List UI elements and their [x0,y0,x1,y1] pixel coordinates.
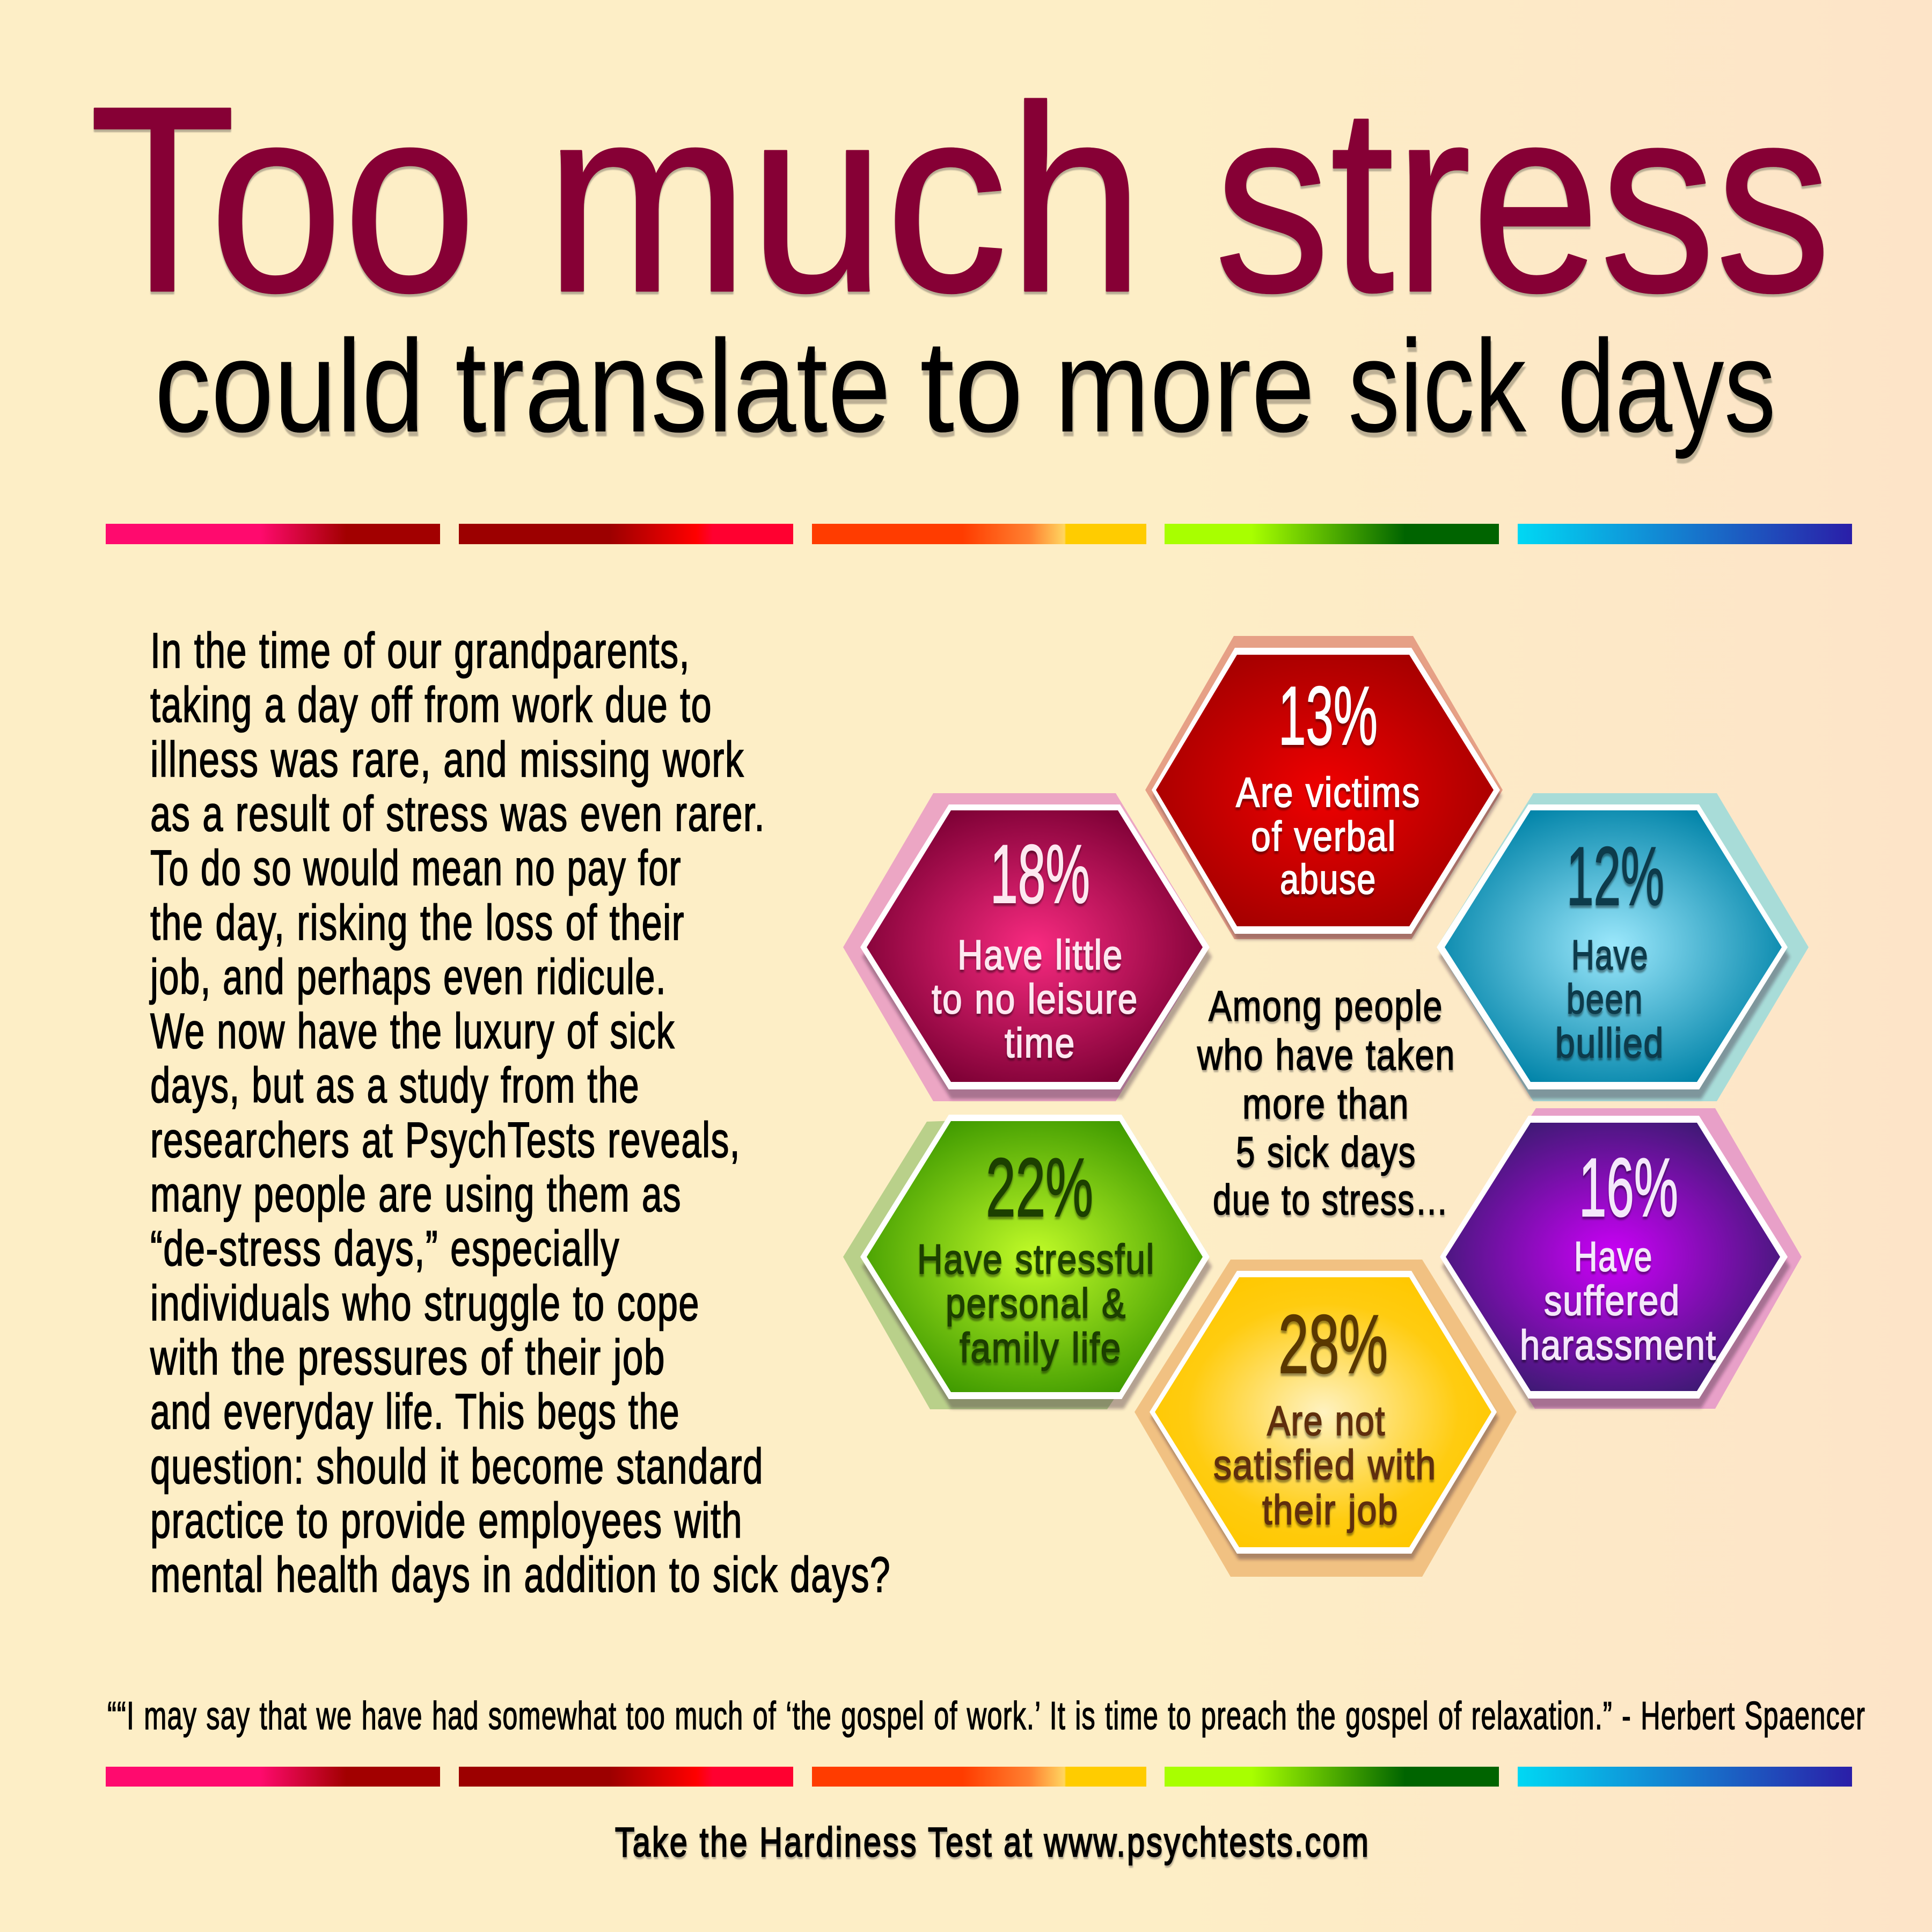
body text block: and everyday life. This begs the [150,1384,680,1439]
center caption: more than [1242,1080,1409,1128]
subtitle: could [155,312,425,459]
hexagon: 12% bullied [1437,793,1809,1101]
12% hexagon text: bullied [1555,1019,1664,1066]
22% hexagon text: Have stressful [917,1235,1155,1283]
title: much [545,51,1144,347]
28% hexagon text [1213,1298,1437,1533]
18% hexagon text: to no leisure [932,975,1138,1022]
18% hexagon text [932,828,1138,1066]
body text block: researchers at PsychTests reveals, [150,1112,741,1168]
body text block: To do so would mean no pay for [150,840,682,896]
16% hexagon text: harassment [1520,1321,1717,1368]
center caption: due to stress… [1213,1176,1449,1224]
28% hexagon text: their job [1262,1486,1399,1533]
hexagon: 18% little leisure time [843,793,1210,1101]
16% hexagon text: 16% [1579,1141,1678,1234]
12% hexagon text: been [1567,975,1643,1022]
hexagon: 28% job dissatisfaction [1135,1260,1517,1577]
12% hexagon text: 12% [1567,830,1664,923]
28% hexagon text: 28% [1278,1298,1388,1391]
16% hexagon text: Have [1574,1233,1653,1280]
top rainbow divider [106,524,1852,544]
subtitle: sick [1348,312,1526,459]
hexagon: 22% stressful personal life [843,1115,1210,1409]
bottom rainbow divider [106,1767,1852,1787]
13% hexagon text: of verbal [1251,813,1396,860]
center caption: Among people [1209,982,1443,1030]
body text block: the day, risking the loss of their [150,895,685,950]
hexagon: 13% verbal abuse [1145,636,1503,939]
body text block: question: should it become standard [150,1438,764,1494]
13% hexagon text: Are victims [1236,769,1421,816]
12% hexagon text: Have [1571,931,1649,978]
13% hexagon text [1236,669,1421,903]
subtitle: days [1557,312,1776,459]
center caption: 5 sick days [1236,1128,1416,1176]
22% hexagon text: family life [960,1324,1122,1371]
subtitle [155,312,1776,459]
16% hexagon text: suffered [1544,1277,1680,1324]
22% hexagon text: 22% [986,1141,1093,1234]
16% hexagon text [1520,1141,1717,1368]
title: stress [1214,51,1831,347]
12% hexagon text [1555,830,1664,1066]
body text block: days, but as a study from the [150,1057,640,1113]
title [89,51,1831,347]
body text block: as a result of stress was even rarer. [150,786,765,841]
body text block: We now have the luxury of sick [150,1003,675,1059]
28% hexagon text: Are not [1267,1397,1386,1444]
18% hexagon text: time [1005,1019,1075,1066]
13% hexagon text: 13% [1278,669,1378,762]
hexagon: 16% harassment [1440,1108,1802,1409]
body text block: “de-stress days,” especially [150,1220,620,1276]
center caption [1197,982,1455,1224]
body text block: practice to provide employees with [150,1492,743,1548]
footer call to action: Take the Hardiness Test at www.psychtests.com [615,1819,1370,1865]
body text block: many people are using them as [150,1166,682,1222]
title: Too [89,51,477,347]
18% hexagon text: Have little [957,931,1123,978]
center caption: who have taken [1197,1031,1455,1079]
body text block: mental health days in addition to sick days? [150,1547,891,1602]
body text block: taking a day off from work due to [150,677,712,733]
13% hexagon text: abuse [1280,855,1377,903]
22% hexagon text [917,1141,1155,1371]
subtitle: translate [455,312,891,459]
body text block: illness was rare, and missing work [150,731,744,787]
28% hexagon text: satisfied with [1213,1441,1437,1488]
subtitle: to [920,312,1023,459]
body text block: individuals who struggle to cope [150,1275,700,1331]
18% hexagon text: 18% [990,828,1090,920]
body text block [149,623,891,1602]
subtitle: more [1055,312,1315,459]
body text block: In the time of our grandparents, [150,623,690,678]
body text block: with the pressures of their job [150,1329,665,1385]
22% hexagon text: personal & [946,1279,1126,1327]
body text block: job, and perhaps even ridicule. [149,949,667,1005]
